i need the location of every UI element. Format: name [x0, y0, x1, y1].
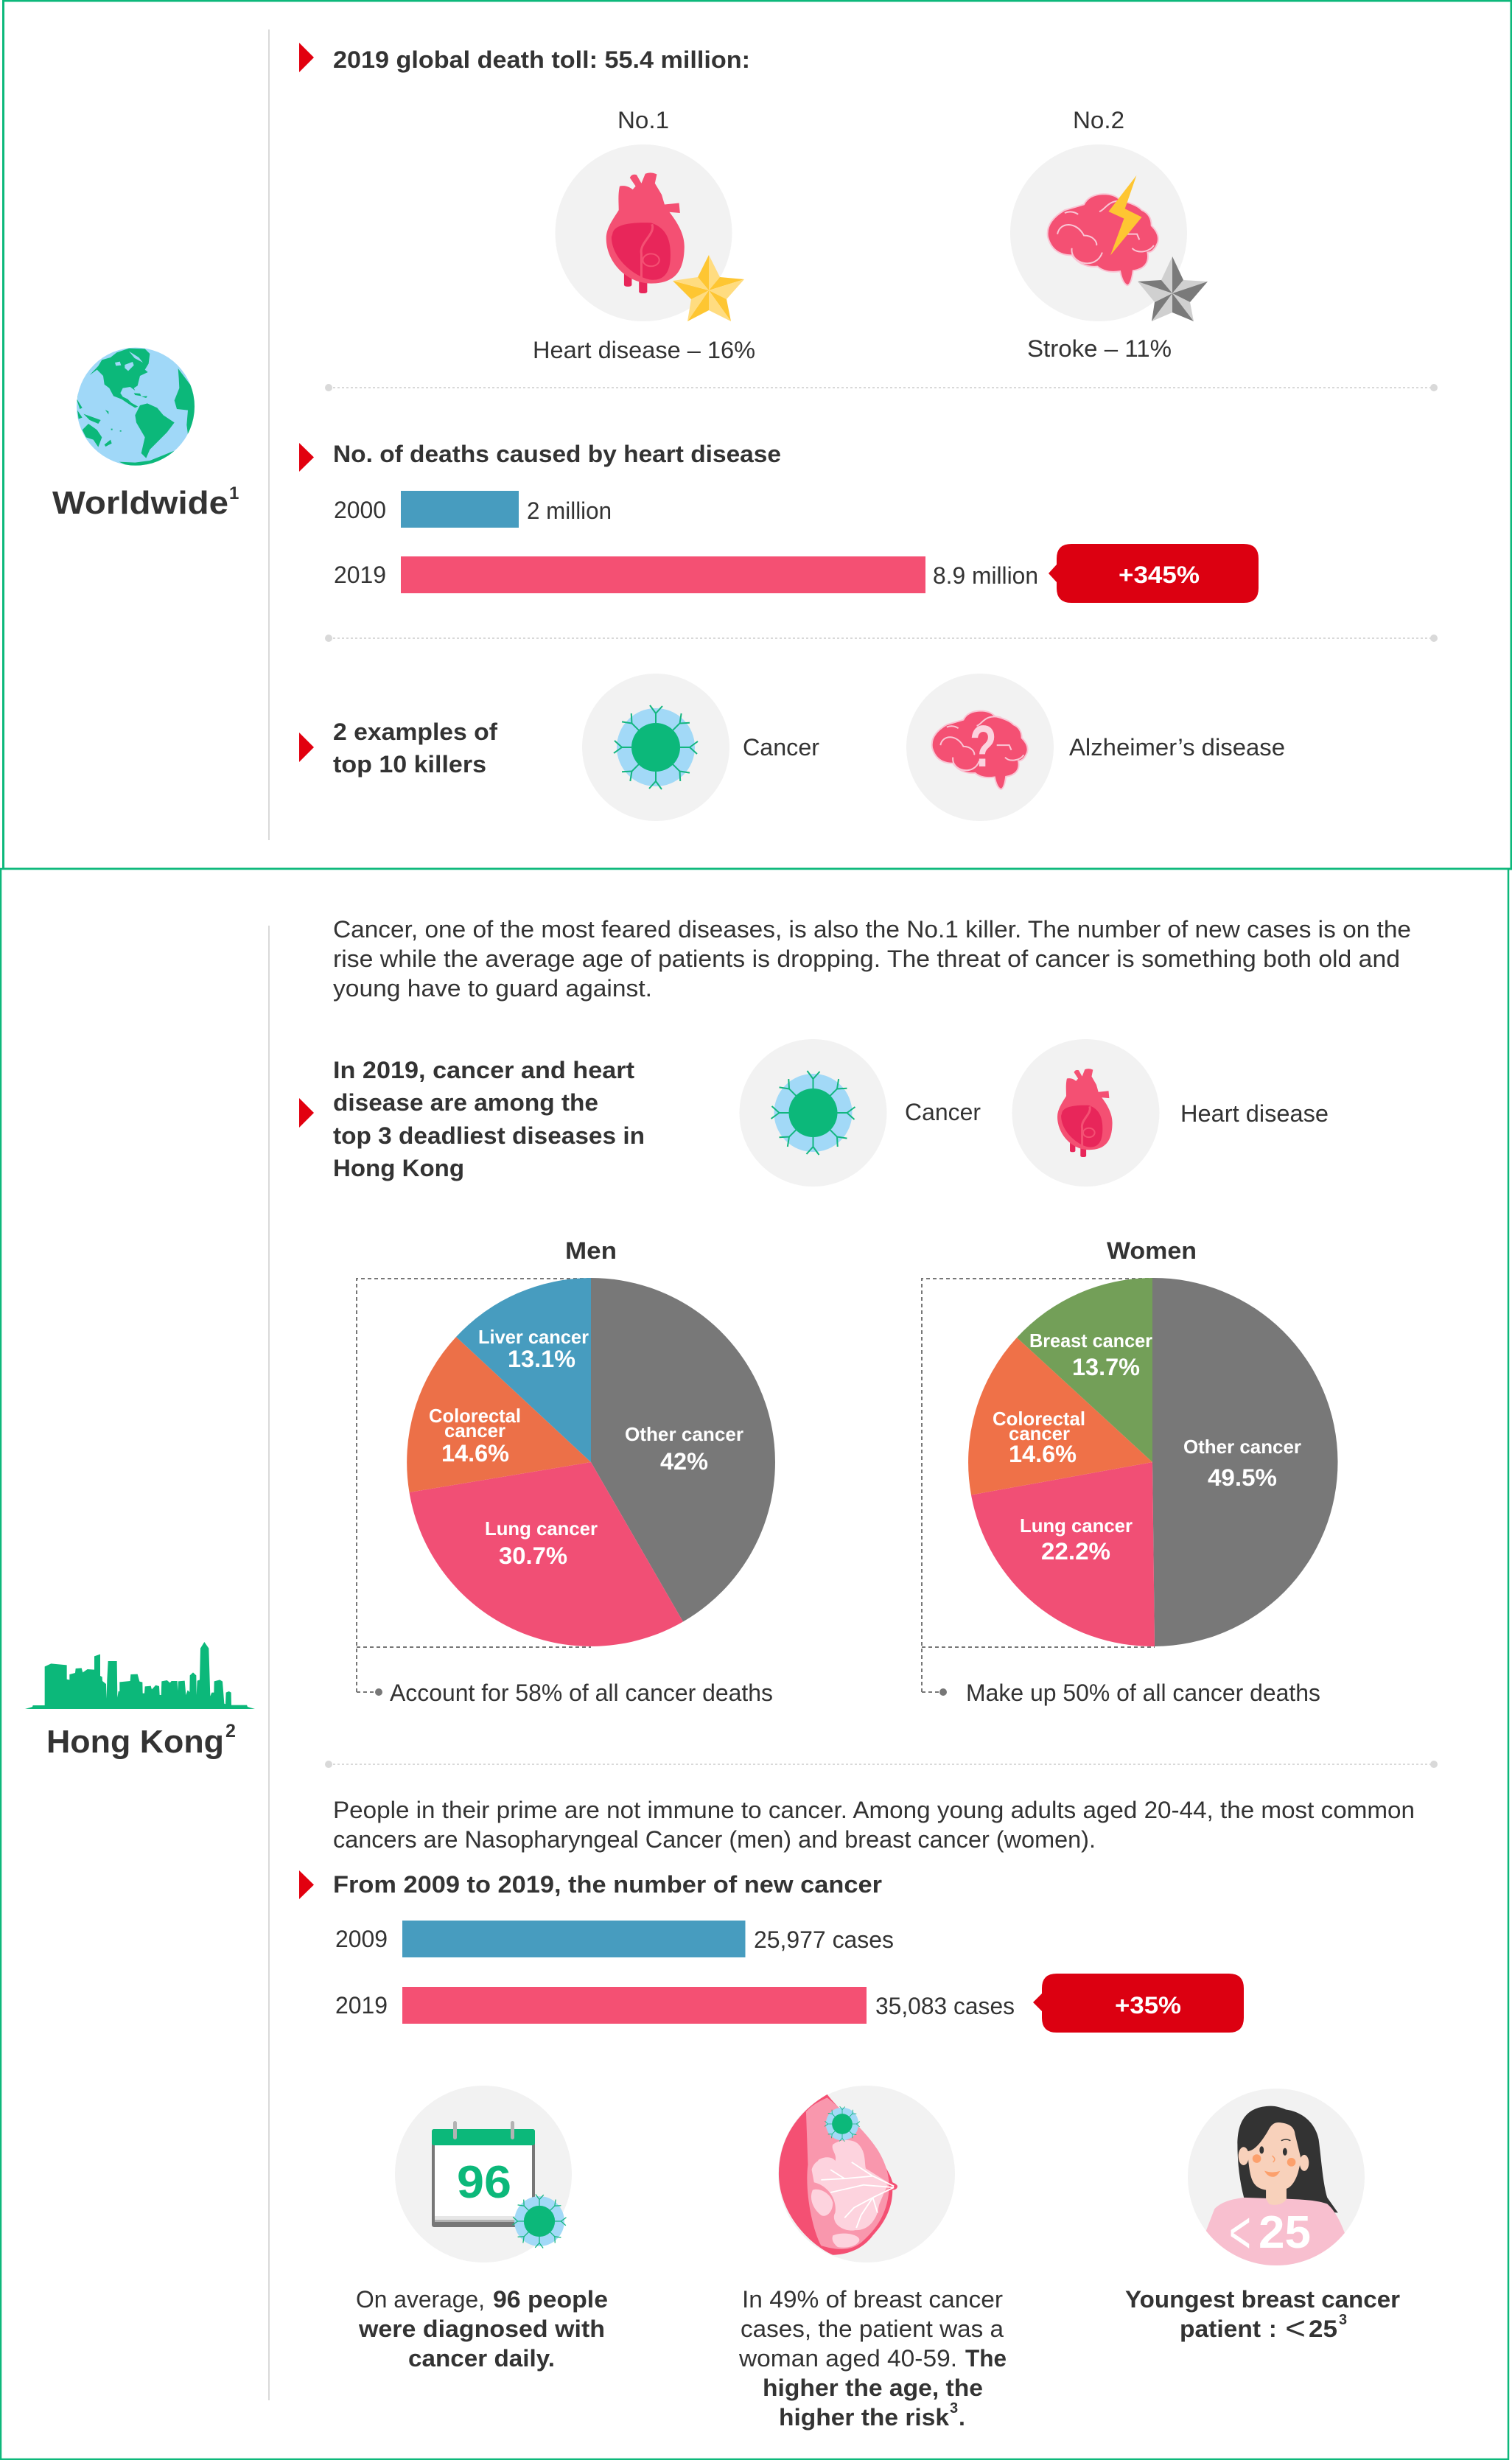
label: Worldwide: Worldwide — [52, 485, 228, 521]
panel: worldwide — [3, 1, 1511, 869]
pie chart: men: Account for 58% of all cancer deaths — [390, 1680, 773, 1706]
pie chart: men: Lung cancer — [485, 1517, 598, 1540]
item: No.1 heart disease: No.1 — [617, 107, 669, 133]
pie chart: women: 13.7% — [1072, 1354, 1140, 1380]
item: 96 people daily: 96 people — [493, 2286, 608, 2313]
item: breast cancer age: In 49% of breast cancer — [742, 2286, 1003, 2313]
text block: people in their prime: People in their prime are not immune to cancer. Among young adults aged 20-44, the most common — [333, 1797, 1415, 1823]
item: youngest patient — [1125, 2089, 1400, 2347]
pie chart: women: 49.5% — [1208, 1464, 1277, 1491]
heading: top 3 deadliest diseases: In 2019, cancer and heart — [333, 1057, 634, 1083]
heading: top 3 deadliest diseases: top 3 deadliest diseases in — [333, 1122, 645, 1149]
item: breast cancer age: 3 — [950, 2400, 958, 2417]
item: cancer: Cancer — [743, 734, 819, 761]
pie chart: men: 30.7% — [499, 1542, 567, 1569]
pie chart: men: Colorectal — [429, 1405, 521, 1427]
item: youngest patient: patient — [1180, 2316, 1261, 2342]
bar chart: new cancer cases: 2019 — [335, 1992, 388, 2019]
pie chart: men — [357, 1237, 775, 1706]
text block: intro: rise while the average age of patients is dropping. The threat of cancer is something both old and — [333, 946, 1400, 972]
icon: heart — [1057, 1069, 1113, 1157]
item: No.1 heart disease: Heart disease – 16% — [533, 337, 755, 363]
text block: people in their prime: cancers are Nasopharyngeal Cancer (men) and breast cancer (women). — [333, 1826, 1096, 1853]
item: No.2 stroke — [1010, 107, 1208, 362]
item: breast cancer age — [738, 2086, 1007, 2431]
heading: top 3 deadliest diseases: Hong Kong — [333, 1155, 464, 1181]
pie chart: women: Breast cancer — [1029, 1329, 1152, 1352]
item: cancer: Cancer — [905, 1099, 981, 1125]
heading: top 10 killers: top 10 killers — [333, 751, 486, 778]
panel: Hong Kong — [1, 869, 1508, 2459]
icon: breast cross-section — [779, 2094, 897, 2255]
pie chart: women: Women — [1107, 1237, 1197, 1264]
item: cancer — [582, 674, 819, 821]
label: Hong Kong: 2 — [225, 1721, 236, 1741]
item: youngest patient: < — [1285, 2310, 1306, 2347]
bar chart: new cancer cases: 35,083 cases — [875, 1993, 1015, 2019]
item: cancer — [740, 1039, 981, 1187]
item: breast cancer age: . — [959, 2404, 965, 2431]
icon: young woman: 25 — [1259, 2207, 1311, 2258]
label: Hong Kong: Hong Kong — [46, 1724, 224, 1760]
bar chart: new cancer cases: 2009 — [335, 1926, 388, 1952]
heading: top 3 deadliest diseases: disease are among the — [333, 1089, 598, 1116]
bar chart: heart disease deaths: 2019 — [334, 562, 386, 588]
icon: calendar — [432, 2121, 535, 2227]
item: breast cancer age: higher the age, the — [763, 2375, 983, 2401]
pie chart: men: cancer — [444, 1419, 505, 1442]
callout: +345% — [1049, 544, 1259, 603]
item: heart disease: Heart disease — [1180, 1100, 1329, 1127]
callout: +345%: +345% — [1119, 562, 1200, 588]
callout: +35% — [1033, 1974, 1244, 2033]
item: youngest patient: 3 — [1339, 2312, 1347, 2328]
pie chart: women: cancer — [1009, 1422, 1070, 1444]
text block: people in their prime — [333, 1797, 1415, 1853]
pie chart: women: Lung cancer — [1020, 1514, 1133, 1537]
item: youngest patient: : — [1269, 2316, 1277, 2342]
item: youngest patient: Youngest breast cancer — [1125, 2286, 1400, 2313]
pie chart: women: Other cancer — [1183, 1436, 1301, 1458]
item: 96 people daily: cancer daily. — [408, 2345, 555, 2372]
text block: intro: young have to guard against. — [333, 975, 652, 1002]
item: 96 people daily: were diagnosed with — [358, 2316, 605, 2342]
item: Alzheimer's disease — [906, 674, 1285, 821]
bar chart: heart disease deaths — [334, 491, 1259, 603]
icon: calendar: 96 — [457, 2157, 511, 2208]
heading: top 3 deadliest diseases — [299, 1057, 645, 1181]
pie chart: women — [922, 1237, 1338, 1706]
pie chart: women: 22.2% — [1041, 1538, 1110, 1565]
icon: gold star — [673, 255, 744, 321]
text block: intro: Cancer, one of the most feared diseases, is also the No.1 killer. The number of new cases is on the — [333, 916, 1411, 943]
bar chart: heart disease deaths: 2 million — [527, 497, 612, 524]
icon: silver star — [1138, 256, 1208, 321]
pie chart: women: Colorectal — [993, 1408, 1085, 1430]
item: breast cancer age: The — [965, 2345, 1007, 2372]
pie chart: men: 42% — [660, 1448, 708, 1475]
icon: heart — [606, 172, 685, 293]
heading: deaths caused by heart disease: No. of deaths caused by heart disease — [333, 441, 781, 467]
label: Worldwide: 1 — [229, 483, 239, 503]
bar chart: new cancer cases: 25,977 cases — [754, 1926, 894, 1953]
icon: young woman: < — [1229, 2199, 1251, 2266]
icon: cancer cell — [513, 2195, 566, 2248]
pie chart: men: Men — [565, 1237, 617, 1264]
text block: intro — [333, 916, 1411, 1002]
heading: new cancer cases: From 2009 to 2019, the number of new cancer — [333, 1871, 882, 1898]
item: breast cancer age: woman aged 40-59. — [738, 2345, 957, 2372]
item: breast cancer age: higher the risk — [779, 2404, 949, 2431]
item: Alzheimer's disease: Alzheimer’s disease — [1069, 734, 1285, 761]
pie chart: women: Make up 50% of all cancer deaths — [966, 1680, 1320, 1706]
pie chart: men: 13.1% — [508, 1346, 575, 1372]
icon: Hong Kong skyline — [25, 1642, 255, 1709]
bar chart: new cancer cases — [335, 1921, 1244, 2033]
item: heart disease — [1012, 1039, 1329, 1187]
heading: top 10 killers: 2 examples of — [333, 719, 497, 745]
heading: top 10 killers — [299, 719, 497, 778]
icon: young woman — [1205, 2106, 1345, 2265]
item: 96 people daily: On average, — [356, 2286, 485, 2313]
item: youngest patient: 25 — [1309, 2316, 1337, 2342]
item: breast cancer age: cases, the patient was a — [741, 2316, 1004, 2342]
icon: brain with lightning — [1048, 175, 1158, 285]
bar chart: heart disease deaths: 8.9 million — [933, 562, 1038, 589]
heading: global death toll: 2019 global death toll: 55.4 million: — [333, 46, 750, 73]
icon: globe — [76, 348, 195, 469]
item: 96 people daily — [356, 2086, 608, 2372]
pie chart: men: 14.6% — [441, 1440, 509, 1467]
icon: brain with question mark: ? — [970, 713, 997, 779]
callout: +35%: +35% — [1115, 1992, 1181, 2019]
icon: cancer cell — [771, 1071, 855, 1155]
icon: cancer cell — [614, 705, 698, 789]
item: No.1 heart disease — [533, 107, 755, 363]
pie chart: men: Liver cancer — [478, 1326, 589, 1348]
pie chart: women: 14.6% — [1009, 1441, 1077, 1467]
bar chart: heart disease deaths: 2000 — [334, 497, 386, 523]
pie chart: men: Other cancer — [625, 1423, 743, 1445]
item: No.2 stroke: No.2 — [1073, 107, 1124, 133]
icon: brain with question mark — [932, 711, 1028, 789]
item: No.2 stroke: Stroke – 11% — [1027, 335, 1172, 362]
